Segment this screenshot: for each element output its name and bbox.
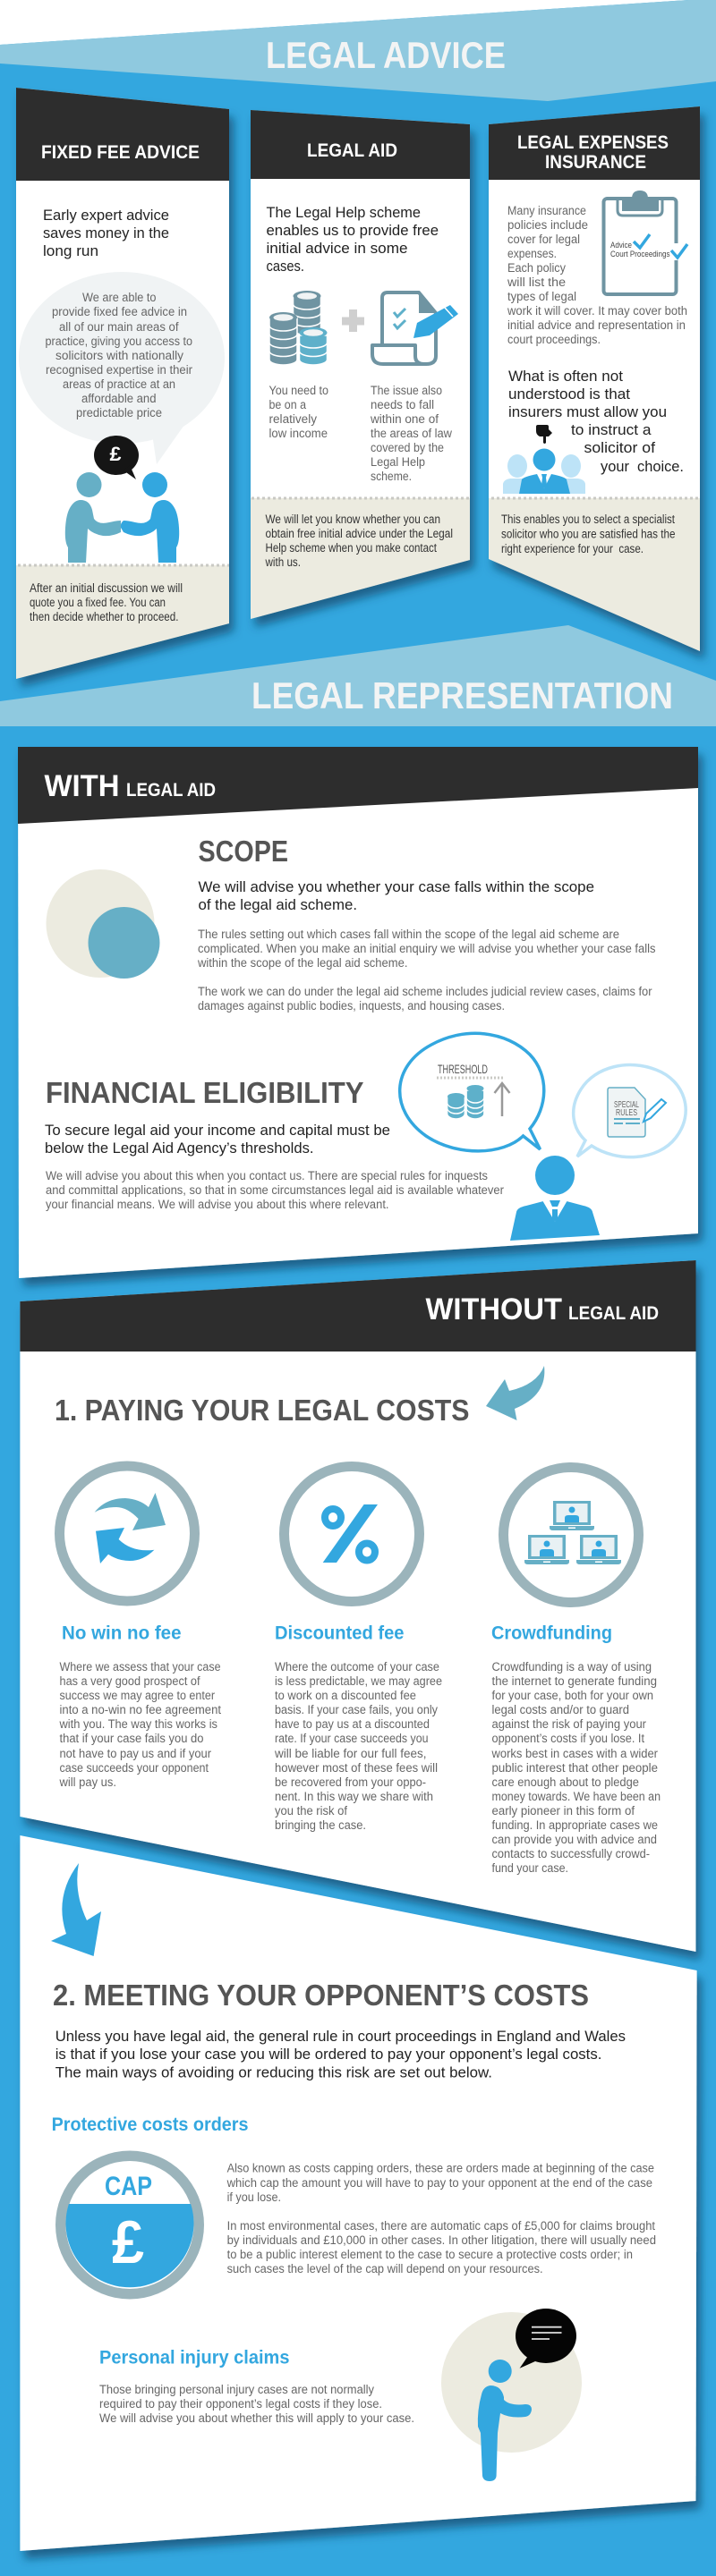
text: area of law: covered by the [371, 441, 444, 454]
text: choice of solicitor: to instruct a [571, 421, 652, 438]
text: general rule [55, 2028, 626, 2080]
speech bubble: fixed fee: practice, giving you access to [45, 335, 192, 348]
heading: legal expenses insurance: LEGAL EXPENSES [517, 132, 669, 153]
text: insurance policies: court proceedings. [507, 333, 601, 346]
text: personal injury claims: required to pay their opponent’s legal costs if they lose. [99, 2397, 382, 2411]
text: protective costs orders: if you lose. [227, 2190, 281, 2204]
speech bubble: fixed fee: predictable price [76, 406, 162, 419]
icon: no win no fee arrows [59, 1466, 195, 1601]
panel: meeting your opponent's costs [20, 1835, 697, 2551]
text: legal help scheme: The Legal Help scheme [267, 204, 421, 221]
text: discounted fee: be recovered from your oppo- [275, 1775, 426, 1789]
text: crowdfunding: early pioneer in this form of [492, 1804, 635, 1818]
heading: legal expenses insurance: INSURANCE [545, 152, 646, 173]
speech bubble: special rules: SPECIAL [614, 1100, 639, 1110]
text: select a specialist [501, 513, 675, 555]
text: legal help scheme [267, 204, 439, 275]
text: financial detail: and committal applications, so that in some circumstances legal aid is available whatever [46, 1183, 504, 1197]
text: no win no fee: will pay us. [59, 1775, 116, 1789]
speech bubble: fixed fee: solicitors with nationally [55, 349, 183, 362]
text: free initial advice [265, 513, 453, 569]
speech bubble: fixed fee [19, 272, 225, 464]
text: crowdfunding: care enough about to pledge [492, 1775, 639, 1789]
text: no win no fee: not have to pay us and if your [59, 1747, 211, 1760]
icon: clipboard checklist [603, 191, 687, 294]
text: select a specialist: This enables you to select a specialist [501, 513, 675, 526]
text: choice of solicitor: solicitor of [584, 439, 655, 456]
text: insurance policies: types of legal [507, 290, 576, 303]
heading: without legal aid [426, 1292, 659, 1326]
icon: plus [342, 309, 364, 332]
title: legal representation: LEGAL REPRESENTATION [251, 674, 673, 716]
text: crowdfunding: the internet to generate funding [492, 1674, 657, 1688]
heading: meeting your opponent's costs: 2. MEETING YOUR OPPONENT’S COSTS [53, 1979, 589, 2012]
text: free initial advice: We will let you know whether you can [265, 513, 440, 526]
heading: without legal aid: LEGAL AID [568, 1303, 659, 1324]
text: no win no fee: case succeeds your opponent [59, 1761, 209, 1775]
text: financial lead: To secure legal aid your income and capital must be [45, 1122, 390, 1139]
text: protective costs orders: by individuals and £10,000 in other cases. In other litigation, there will usually need [227, 2233, 656, 2247]
heading: without legal aid: WITHOUT [426, 1292, 562, 1326]
heading: financial eligibility: FINANCIAL ELIGIBILITY [46, 1076, 363, 1109]
arrow: curved blue [51, 1863, 101, 1956]
speech bubble: fixed fee: all of our main areas of [59, 320, 179, 334]
text: insurance policies: expenses. [507, 247, 557, 260]
text: crowdfunding: contacts to successfully crowd- [492, 1847, 650, 1860]
text: scope detail [197, 928, 656, 1013]
text: protective costs orders: Also known as costs capping orders, these are orders made at beginning of the case [227, 2161, 654, 2175]
text: insurance policies: work it will cover. It may cover both [507, 304, 687, 318]
text: general rule: Unless you have legal aid, the general rule in court proceedings in England and Wales [55, 2028, 626, 2045]
text: discounted fee: rate. If your case succeeds you [275, 1732, 428, 1745]
text: crowdfunding: public interest that other people [492, 1761, 658, 1775]
text: legal help scheme: enables us to provide free [267, 222, 439, 239]
text: no win no fee: Where we assess that your case [59, 1660, 220, 1674]
text: insurance policies: Many insurance [507, 204, 586, 217]
text: general rule: is that if you lose your case you will be ordered to pay your opponent’s legal costs. [55, 2046, 601, 2063]
text: crowdfunding: can provide you with advice and [492, 1833, 657, 1846]
text: crowdfunding: Crowdfunding is a way of using [492, 1660, 652, 1674]
icon: cap badge [55, 2150, 204, 2299]
text: choice of solicitor [508, 368, 684, 475]
text: free initial advice: Help scheme when you make contact [265, 541, 437, 555]
icon: coin stacks [269, 291, 328, 365]
icon: clipboard checklist: Court Proceedings [610, 250, 670, 259]
text: select a specialist: right experience for your case. [501, 542, 644, 555]
text: personal injury claims [99, 2383, 414, 2425]
heading: paying your legal costs: 1. PAYING YOUR LEGAL COSTS [55, 1394, 469, 1427]
text: early expert advice: long run [43, 242, 98, 259]
text: no win no fee [59, 1660, 221, 1789]
text: discounted fee: you the risk of [275, 1804, 347, 1818]
panel: without legal aid [20, 1260, 695, 1952]
heading: protective costs orders: Protective costs orders [52, 2114, 248, 2135]
text: crowdfunding: for your case, both for your own [492, 1689, 653, 1702]
banner: legal representation [0, 625, 716, 726]
text: area of law: the areas of law [371, 427, 452, 440]
text: crowdfunding: against the risk of paying your [492, 1717, 646, 1731]
text: scope lead: We will advise you whether your case falls within the scope [199, 878, 594, 895]
text: financial lead [45, 1122, 390, 1157]
text: scope lead [199, 878, 594, 913]
text: protective costs orders: to be a public interest element to the case to secure a protective costs order; in [227, 2248, 633, 2261]
text: scope lead: of the legal aid scheme. [199, 896, 357, 913]
text: no win no fee: success we may agree to enter [59, 1689, 215, 1702]
heading: with legal aid: LEGAL AID [126, 780, 216, 801]
text: crowdfunding: fund your case. [492, 1861, 568, 1875]
text: early expert advice: saves money in the [43, 225, 169, 242]
text: early expert advice: Early expert advice [43, 207, 169, 224]
text: no win no fee: that if your case fails you do [59, 1732, 204, 1745]
text: area of law: scheme. [371, 470, 412, 483]
speech bubble: fixed fee: recognised expertise in their [46, 363, 192, 377]
text: discounted fee: bringing the case. [275, 1818, 366, 1832]
heading: fixed fee advice: FIXED FEE ADVICE [41, 142, 200, 163]
text: select a specialist: solicitor who you are satisfied has the [501, 528, 675, 540]
text: financial detail [46, 1169, 504, 1211]
text: choice of solicitor: understood is that [508, 386, 630, 402]
text: discounted fee [274, 1660, 442, 1832]
text: free initial advice: with us. [265, 555, 301, 569]
heading: crowdfunding: Crowdfunding [491, 1623, 612, 1644]
text: low income: low income [268, 427, 328, 440]
text: personal injury claims: Those bringing personal injury cases are not normally [99, 2383, 374, 2396]
heading: scope: SCOPE [199, 835, 288, 868]
text: discounted fee: will be liable for our full fees, [274, 1747, 426, 1760]
text: choice of solicitor: What is often not [508, 368, 623, 385]
text: insurance policies [507, 204, 687, 346]
icon: document with pencil [372, 292, 458, 364]
icon: person speaking [441, 2309, 582, 2481]
text: area of law: Legal Help [371, 455, 425, 469]
heading: with legal aid: WITH [45, 769, 120, 803]
text: scope detail: complicated. When you make an initial enquiry we will advise you whether your case falls [198, 942, 656, 955]
text: general rule: The main ways of avoiding or reducing this risk are set out below. [55, 2064, 492, 2080]
heading: discounted fee: Discounted fee [275, 1623, 405, 1644]
icon: solicitor team [503, 449, 585, 494]
arrow: curved teal [486, 1366, 544, 1420]
text: low income: relatively [268, 412, 317, 426]
text: crowdfunding [491, 1660, 661, 1875]
text: area of law: The issue also [371, 384, 442, 397]
text: financial detail: your financial means. We will advise you about this where relevant. [46, 1198, 388, 1211]
text: protective costs orders [226, 2161, 656, 2275]
heading: legal aid: LEGAL AID [307, 140, 397, 161]
speech bubble: fixed fee: areas of practice at an [63, 377, 175, 391]
icon: percent [285, 1467, 419, 1601]
text: area of law [370, 384, 452, 483]
speech bubble: fixed fee: We are able to [82, 291, 156, 304]
icon: two people shaking hands [65, 472, 179, 563]
panel: legal aid [251, 110, 470, 619]
text: legal help scheme: cases. [267, 258, 304, 275]
text: choice of solicitor: your choice. [601, 458, 684, 475]
text: discounted fee: basis. If your case fails, you only [275, 1703, 438, 1716]
text: scope detail: The rules setting out which cases fall within the scope of the legal aid scheme are [198, 928, 619, 941]
text: early expert advice [43, 207, 169, 259]
text: insurance policies: cover for legal [507, 233, 580, 246]
text: discounted fee: nent. In this way we share with [275, 1790, 433, 1803]
text: low income [268, 384, 328, 440]
text: insurance policies: policies include [507, 218, 588, 232]
icon: cap badge: CAP [105, 2172, 152, 2201]
text: scope detail: within the scope of the legal aid scheme. [197, 956, 408, 970]
text: after an initial discussion [30, 581, 183, 623]
text: discounted fee: however most of these fees will [275, 1761, 438, 1775]
speech bubble: special rules: RULES [616, 1108, 637, 1118]
panel: legal expenses insurance [489, 106, 700, 651]
panel: fixed fee advice [16, 88, 229, 679]
text: no win no fee: with you. The way this works is [59, 1717, 217, 1731]
text: discounted fee: Where the outcome of your case [275, 1660, 439, 1674]
text: free initial advice: obtain free initial advice under the Legal [265, 527, 453, 540]
heading: no win no fee: No win no fee [62, 1623, 181, 1644]
text: crowdfunding: legal costs and/or to guard [492, 1703, 629, 1716]
text: financial lead: below the Legal Aid Agency’s thresholds. [45, 1140, 313, 1157]
text: after an initial discussion: After an initial discussion we will [30, 581, 183, 595]
icon: clipboard checklist: Advice [610, 241, 632, 250]
text: no win no fee: into a no-win no fee agreement [59, 1703, 221, 1716]
text: discounted fee: is less predictable, we may agree [275, 1674, 442, 1688]
text: insurance policies: initial advice and representation in [507, 318, 686, 332]
text: low income: You need to [268, 384, 328, 397]
text: after an initial discussion: quote you a fixed fee. You can [30, 596, 166, 609]
heading: with legal aid [45, 769, 216, 803]
text: crowdfunding: works best in cases with a wider [491, 1747, 658, 1760]
text: insurance policies: will list the [507, 275, 566, 289]
text: after an initial discussion: then decide whether to proceed. [30, 610, 179, 623]
icon: crowdfunding laptops [503, 1467, 639, 1603]
text: legal help scheme: initial advice in some [267, 240, 408, 257]
text: protective costs orders: which cap the amount you will have to pay to your opponent at the end of the case [226, 2176, 652, 2190]
speech bubble: threshold [400, 1033, 544, 1151]
text: insurance policies: Each policy [507, 261, 566, 275]
icon: scope circles [47, 869, 159, 979]
banner: legal advice [0, 0, 716, 101]
icon: pound speech bubble: £ [109, 443, 122, 465]
text: area of law: within one of [370, 412, 439, 426]
text: personal injury claims: We will advise you about whether this will apply to your case. [99, 2411, 414, 2425]
heading: personal injury claims: Personal injury claims [99, 2347, 290, 2368]
icon: cap badge: £ [112, 2208, 144, 2276]
text: crowdfunding: funding. In appropriate cases we [492, 1818, 658, 1832]
text: protective costs orders: such cases the level of the cap will depend on your resources. [227, 2262, 543, 2275]
text: choice of solicitor: insurers must allow you [508, 403, 667, 420]
icon: pointing hand [536, 425, 552, 444]
text: discounted fee: to work on a discounted fee [275, 1689, 416, 1702]
text: area of law: needs to fall [371, 398, 434, 411]
text: scope detail: damages against public bodies, inquests, and housing cases. [198, 999, 505, 1013]
speech bubble: fixed fee: provide fixed fee advice in [52, 305, 187, 318]
text: discounted fee: have to pay us at a discounted [275, 1717, 430, 1731]
text: crowdfunding: money towards. We have been an [492, 1790, 661, 1803]
icon: pound speech bubble [94, 436, 139, 479]
panel: with legal aid [18, 747, 698, 1278]
text: crowdfunding: opponent’s costs if you lose. It [492, 1732, 644, 1745]
icon: solicitor figure [510, 1156, 600, 1241]
text: scope detail: The work we can do under the legal aid scheme includes judicial review cases, claims for [198, 985, 652, 998]
heading: legal expenses insurance [517, 132, 669, 173]
text: financial detail: We will advise you about this when you contact us. There are special rules for inquests [46, 1169, 488, 1182]
title: legal advice: LEGAL ADVICE [266, 34, 506, 76]
speech bubble: fixed fee: affordable and [81, 392, 156, 405]
speech bubble: threshold: THRESHOLD [438, 1062, 488, 1076]
text: no win no fee: has a very good prospect of [59, 1674, 200, 1688]
text: low income: be on a [268, 398, 306, 411]
speech bubble: special rules [574, 1065, 686, 1157]
text: protective costs orders: In most environmental cases, there are automatic caps of £5,000 for claims brought [227, 2219, 655, 2233]
